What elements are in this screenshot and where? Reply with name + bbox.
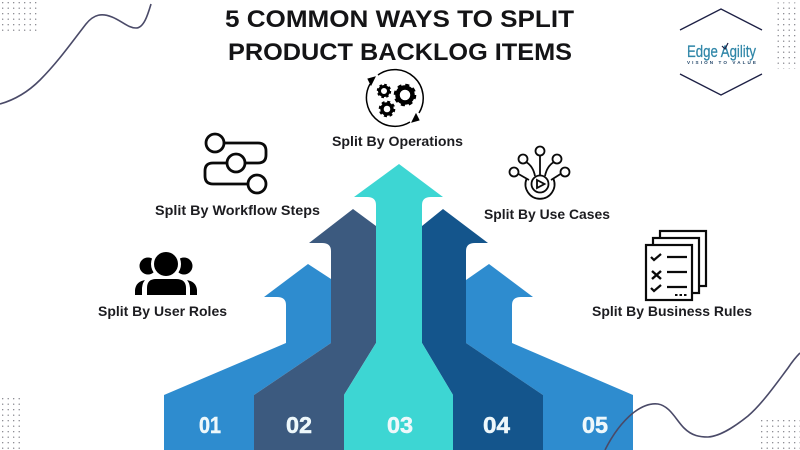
curve: top left — [0, 4, 151, 104]
icon: use cases — [510, 146, 570, 199]
title — [225, 6, 574, 66]
number 03: 03 — [387, 412, 413, 438]
label: user roles: Split By User Roles — [98, 303, 227, 319]
title: 5 COMMON WAYS TO SPLIT — [225, 6, 574, 33]
arrow 05 — [466, 264, 633, 450]
curve: bottom right — [605, 353, 800, 450]
icon: operations gears — [366, 70, 423, 126]
label: workflow steps: Split By Workflow Steps — [155, 202, 320, 218]
arrow 04 — [422, 209, 543, 450]
dot pattern: bottom left — [0, 396, 22, 450]
dot pattern: top left — [0, 0, 39, 31]
logo: Edge Agility — [680, 9, 762, 95]
icon: user roles — [135, 249, 197, 296]
title: PRODUCT BACKLOG ITEMS — [228, 39, 572, 66]
dot pattern: bottom right — [760, 418, 800, 450]
label: operations: Split By Operations — [332, 133, 463, 149]
logo: Edge Agility: Edge Agility — [687, 43, 757, 61]
number 02: 02 — [286, 412, 312, 438]
arrow 01 — [164, 264, 331, 450]
arrow 03 — [344, 164, 453, 450]
label: use cases: Split By Use Cases — [484, 206, 610, 222]
logo: Edge Agility: VISION TO VALUE — [687, 60, 756, 65]
label: business rules: Split By Business Rules — [592, 303, 752, 319]
number 01: 01 — [199, 412, 221, 438]
icon: business rules documents — [646, 231, 706, 300]
icon: workflow steps — [205, 134, 266, 193]
dot pattern: top right — [776, 2, 798, 68]
number 04: 04 — [483, 412, 510, 438]
number 05: 05 — [582, 412, 608, 438]
arrow 02 — [254, 209, 376, 450]
